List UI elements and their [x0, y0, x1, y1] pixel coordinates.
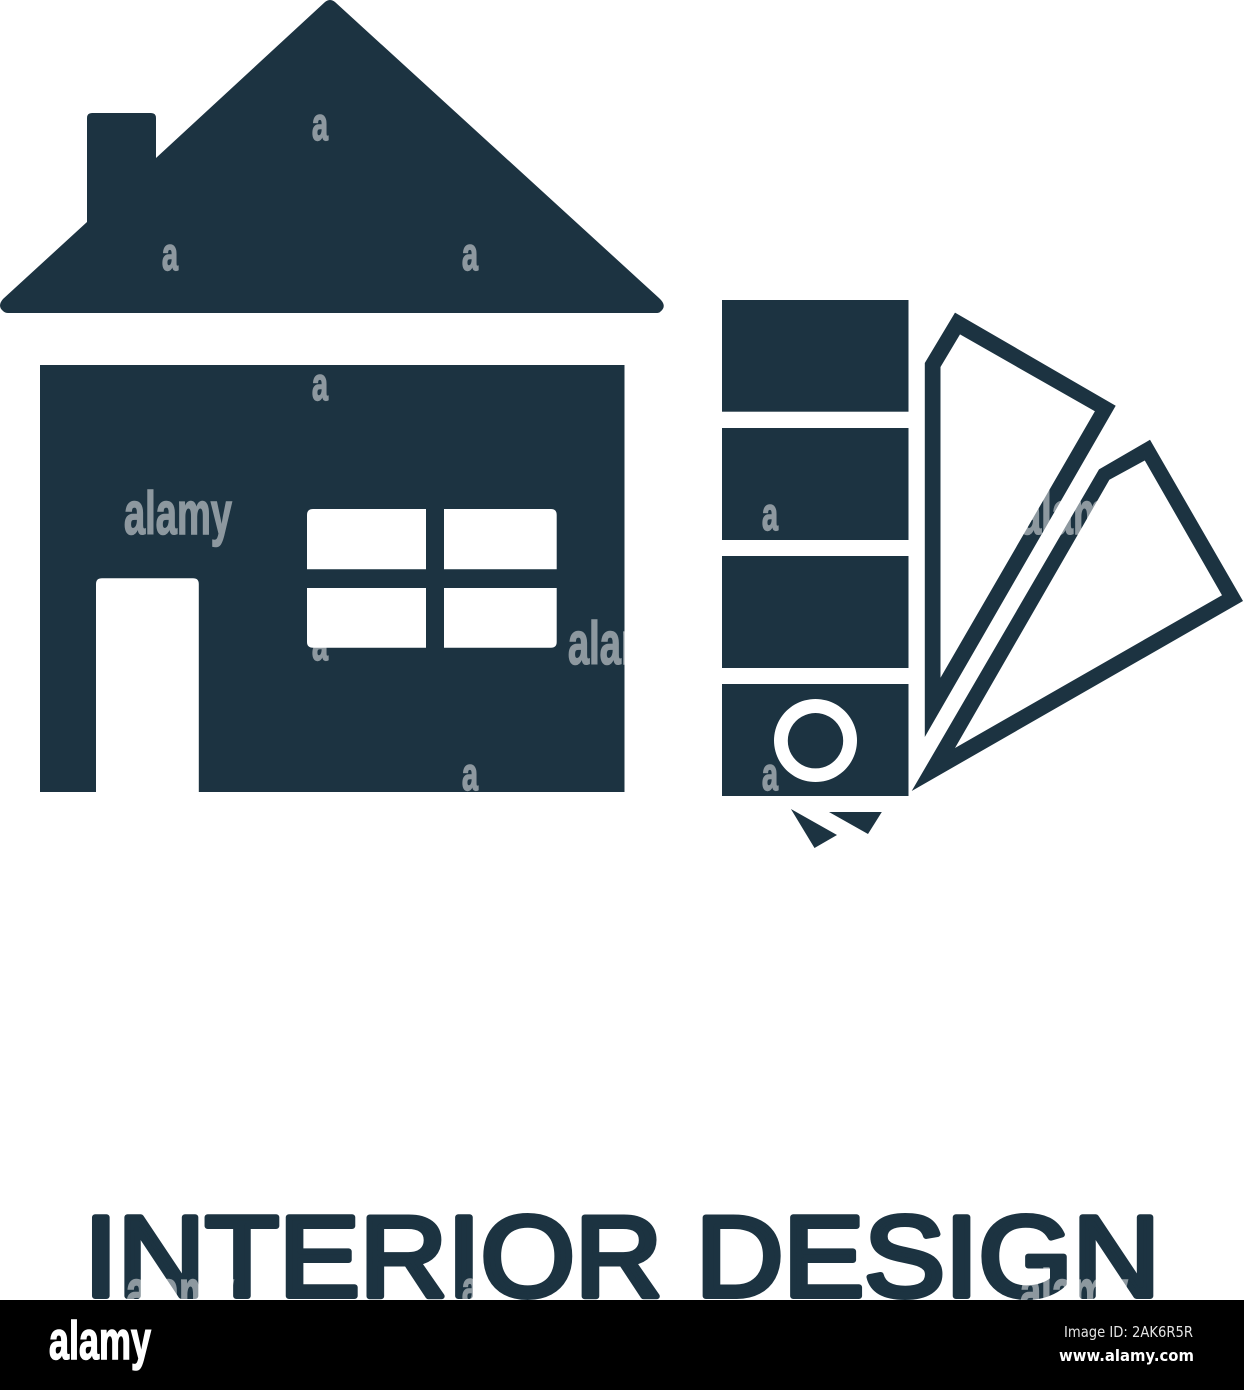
watermark letters: a: [312, 618, 328, 670]
swatch strip 2: [722, 428, 908, 540]
watermark over title right: alamy: [1020, 1258, 1128, 1325]
icon: house: [0, 0, 664, 792]
watermark alamy on wall: alamy: [124, 480, 232, 547]
watermark letters: a: [762, 488, 778, 540]
watermark partial on wall edge: alamy: [568, 610, 676, 677]
footer logo: alamy: [49, 1311, 151, 1371]
house wall with door and window: [40, 365, 624, 792]
house roof with chimney: [0, 0, 664, 313]
swatch strip 3: [722, 556, 908, 668]
watermark letters: a: [462, 748, 478, 800]
swatch hinge triangle right: [829, 812, 882, 834]
watermark over title left: alamy: [126, 1258, 234, 1325]
watermark letters: a: [162, 228, 178, 280]
title: INTERIOR DESIGN: [84, 1194, 1160, 1321]
watermark letters: a: [462, 1262, 478, 1314]
swatch strip 4 with ring: [722, 684, 908, 796]
fan card outline 1: [925, 313, 1116, 737]
icon: colour swatch fan: [722, 300, 1243, 848]
watermark letters: a: [312, 358, 328, 410]
watermark letters: a: [462, 228, 478, 280]
swatch hinge triangle left: [791, 809, 837, 848]
image id: Image ID: 2AK6R5R: [1064, 1323, 1193, 1341]
footer bar: [0, 1300, 1244, 1390]
watermarks: [124, 98, 1128, 1325]
watermark letters: a: [762, 748, 778, 800]
website: www.alamy.com: [1059, 1346, 1194, 1365]
fan card outline 2: [912, 440, 1243, 791]
watermark letters: a: [312, 98, 328, 150]
swatch strip 1: [722, 300, 908, 412]
watermark partial on fan cards: alamy: [1020, 480, 1128, 547]
watermark letters: [162, 98, 778, 1314]
